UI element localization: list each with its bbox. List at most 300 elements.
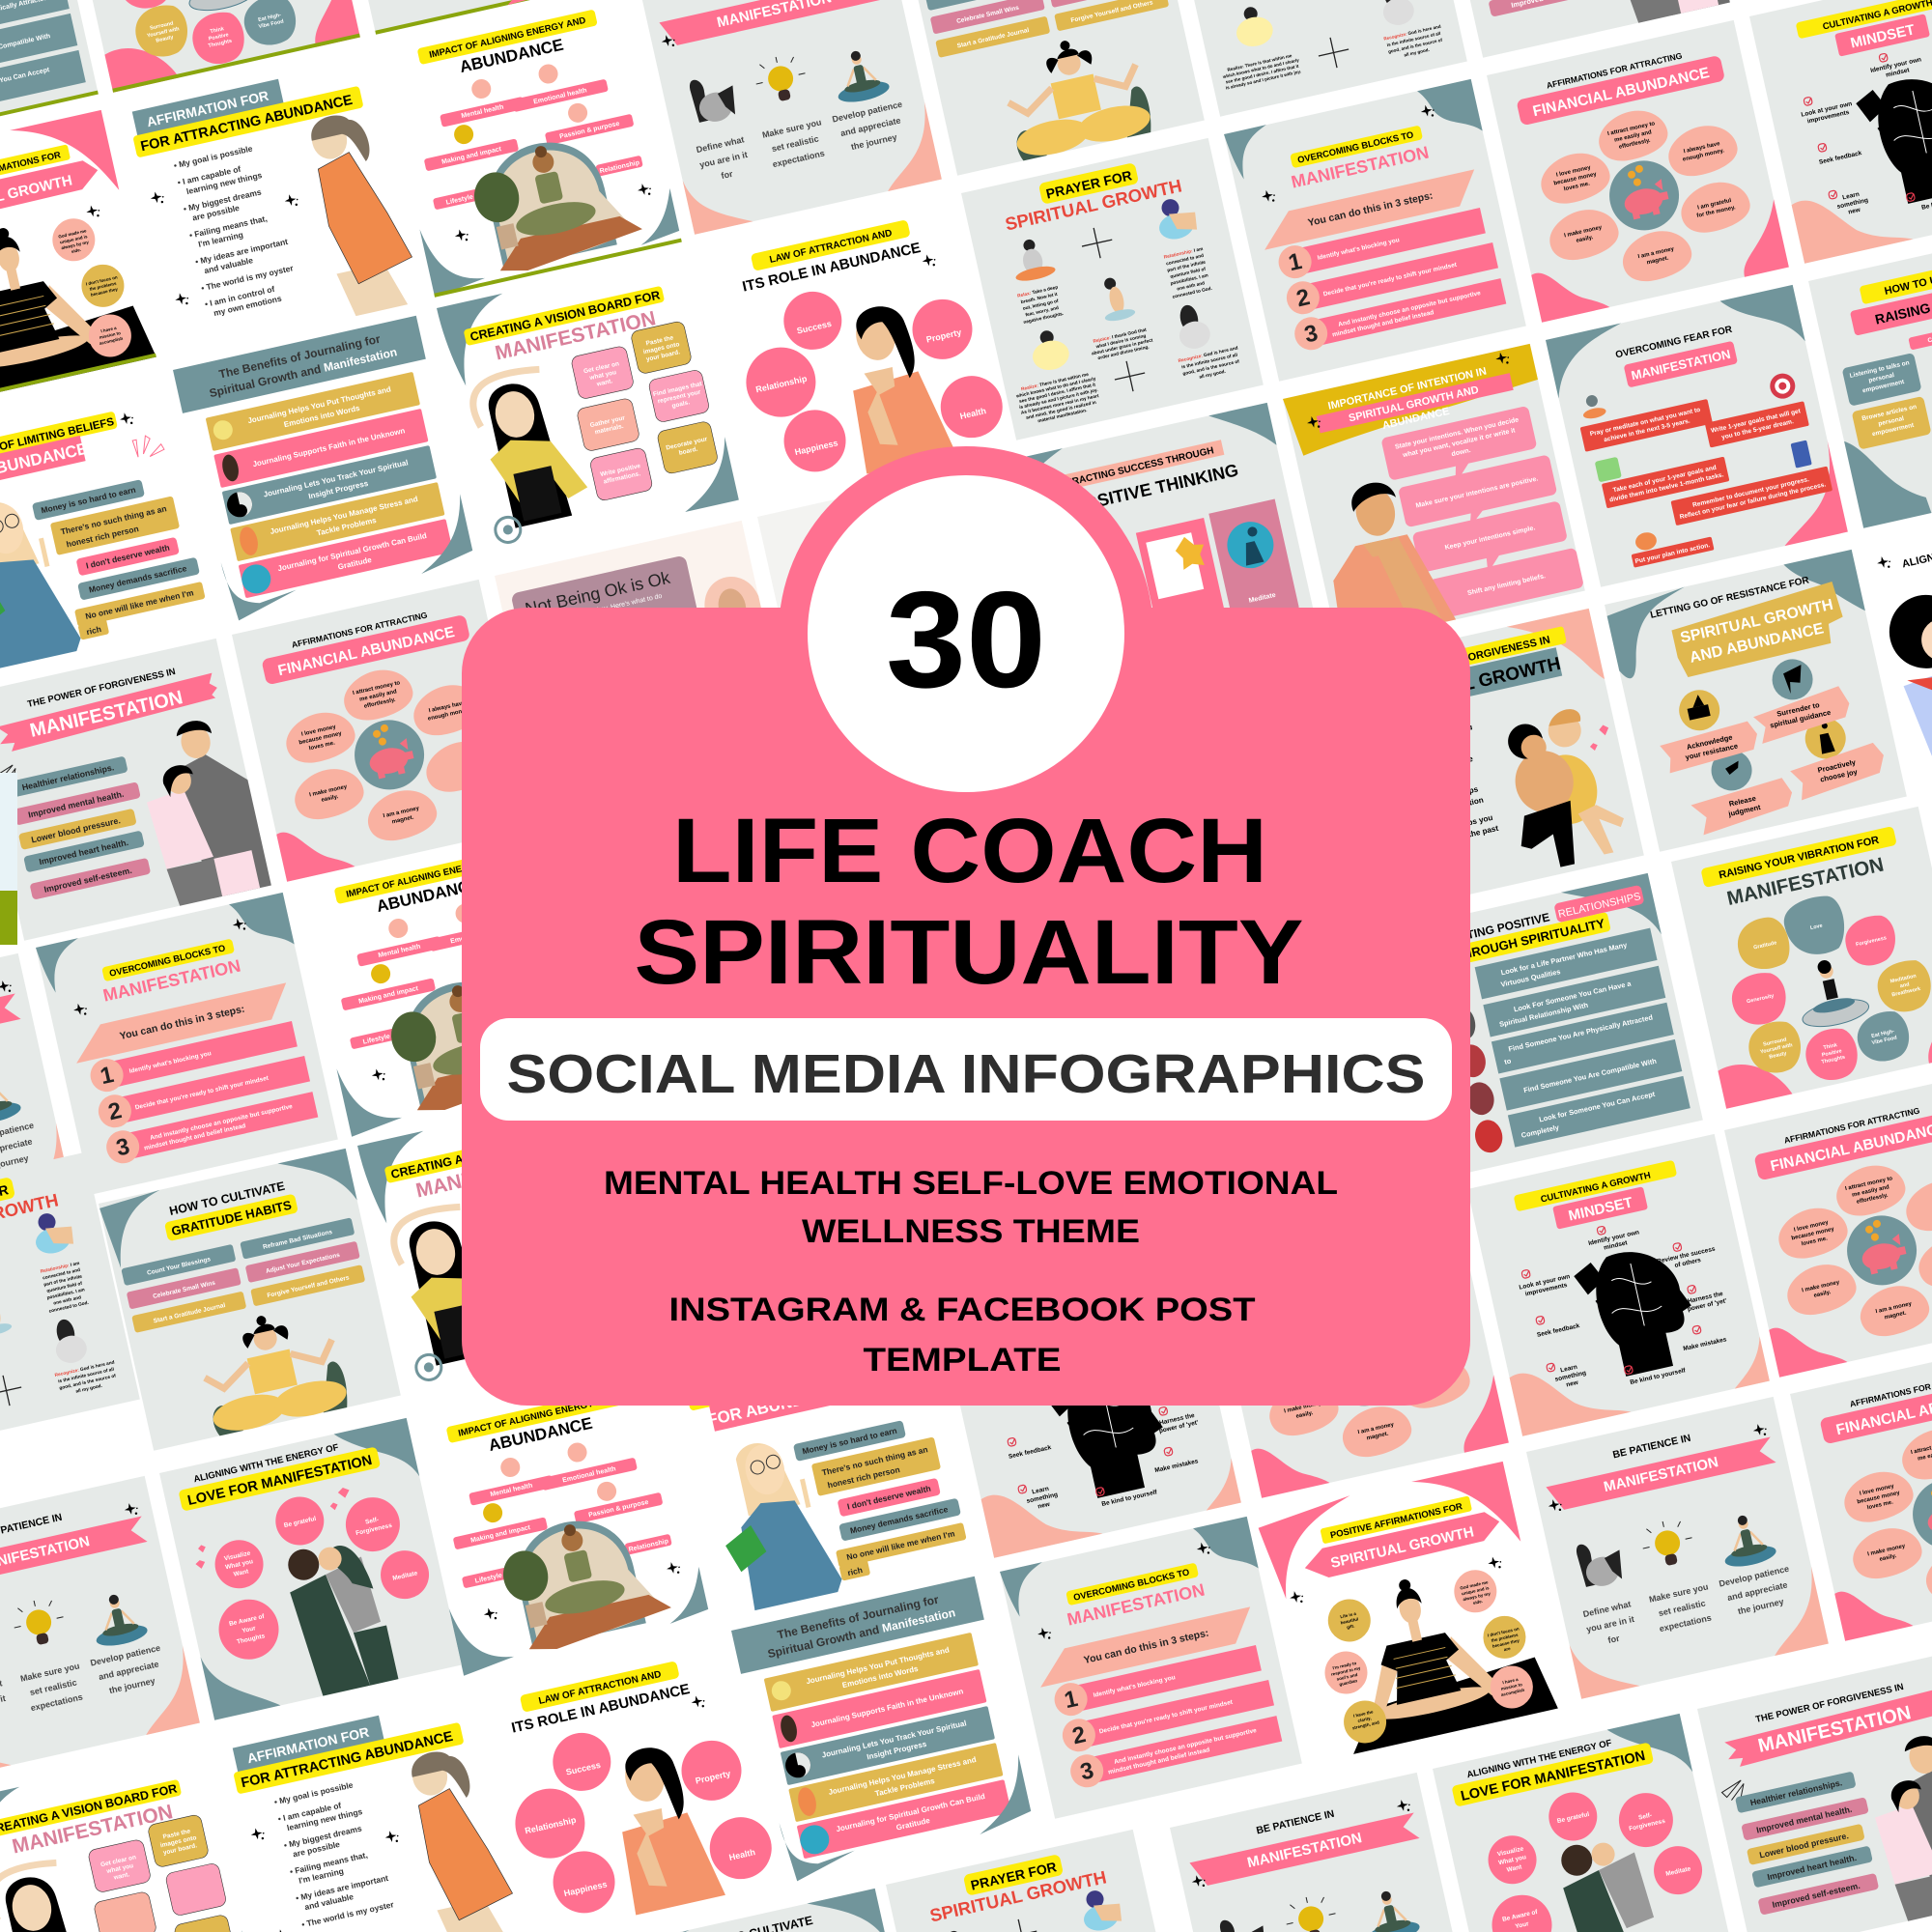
card: be patience (bottom): MANIFESTATION (1246, 1830, 1363, 1871)
card: overcoming fear: achieve in the next 3-5 years. (1604, 417, 1690, 443)
card: positive affirmations (top left): because they (90, 287, 119, 298)
card: power of forgiveness (bottom right): MANIFESTATION (1756, 1702, 1913, 1757)
card: aligning with the energy of love (bottom): Forgiveness (1629, 1818, 1666, 1833)
card: attracting success through positive thinking: POSITIVE THINKING (1071, 460, 1240, 516)
card: forgiveness in spiritual growth: SPIRITUAL GROWTH (1378, 654, 1563, 714)
card: financial abundance: I always have (1683, 141, 1721, 155)
card: financial abundance (right): I make money (1802, 1280, 1840, 1293)
card: creating a vision board: materials. (594, 423, 624, 436)
card: positive affirmations: soul's and (1336, 1672, 1358, 1682)
card: creating a vision board (bottom left): Get clear on (99, 1854, 137, 1868)
card: prayer for spiritual growth: Realize: There is that within me (1020, 372, 1090, 392)
card: be patience (top): for (721, 169, 734, 181)
card: raising your vibration: Yourself with (1760, 1042, 1794, 1056)
card: importance of intention: ABUNDANCE (1381, 406, 1451, 432)
card: financial abundance (left): I am a money (383, 806, 420, 819)
card: positive affirmations (top left): I have a (100, 326, 118, 333)
subtitle pill: SOCIAL MEDIA INFOGRAPHICS (506, 1043, 1426, 1105)
card: law of attraction: Relationship (754, 374, 809, 394)
main pink panel (462, 446, 1470, 1406)
card: creating a vision board: Write positive (600, 463, 641, 478)
card: financial abundance (left): I love money (301, 724, 337, 738)
card: power of forgiveness (bottom right): Healthier relationships. (1749, 1777, 1843, 1807)
card: power of forgiveness (bottom right) (1697, 1654, 1932, 1932)
card: be patience (left): Develop patience (90, 1643, 161, 1668)
card: how to use (right edge): personal (1868, 372, 1895, 384)
card: limiting beliefs: No one will like me when I'm (84, 587, 195, 621)
card: attracting positive relationships: Completely (1520, 1122, 1561, 1140)
card: impact (below panel): Lifestyle (474, 1573, 503, 1585)
card: how to cultivate gratitude habits: Start a Gratitude Journal (153, 1302, 226, 1324)
card: attracting positive relationships: Find Someone You Are Compatible With (1522, 1057, 1658, 1094)
card: limiting beliefs: I don't deserve wealth (85, 543, 170, 571)
card: creating a vision board (left of panel): CREATING A VISION BOARD FOR (389, 1125, 582, 1181)
card: prayer (left edge): all my good. (75, 1383, 103, 1395)
card: forgiveness in spiritual growth: It helps you (1449, 813, 1493, 832)
card: creating a vision board: CREATING A VISION BOARD FOR (469, 288, 662, 344)
card: affirmation for attracting abundance (top): my own emotions (213, 294, 283, 318)
card: overcoming blocks (bottom): You can do this in 3 steps: (1083, 1628, 1209, 1666)
card: financial abundance: I make money (1564, 225, 1603, 239)
card: how to cultivate gratitude habits: GRATITUDE HABITS (170, 1198, 293, 1238)
card: prayer for spiritual growth: out, letting go of (1022, 298, 1060, 312)
card: prayer (top): good, and is the source of (1388, 38, 1443, 54)
card: positive affirmations (top left): side. (71, 247, 81, 254)
card: law of attraction (698, 194, 1011, 499)
card: letting go of resistance: your resistance (1685, 742, 1739, 761)
card: forgiveness in spiritual growth: It heals you (1429, 723, 1473, 741)
card: positive affirmations: the problems (1491, 1633, 1519, 1643)
theme description: MENTAL HEALTH SELF-LOVE EMOTIONAL (604, 1165, 1338, 1202)
card: financial abundance (bottom right): easily. (1879, 1553, 1897, 1563)
card: benefits of journaling: Emotions into Words (283, 404, 361, 429)
card: power of forgiveness in manifestation: Improved self-esteem. (43, 866, 132, 895)
card: cultivating a growth mindset: MINDSET (1567, 1194, 1634, 1225)
card: overcoming blocks (bottom): 1 (1062, 1686, 1080, 1714)
card: affirmation (bottom): learning new things (286, 1806, 363, 1833)
card: attracting success through positive thinking (1020, 403, 1322, 705)
card: prayer for spiritual growth (961, 138, 1264, 440)
card: prayer (bottom) (886, 1830, 1188, 1932)
card: gratitude (bottom) (628, 1889, 930, 1932)
card: raising your vibration (top): Surround (150, 20, 174, 32)
card: overcoming blocks (1224, 79, 1526, 382)
card: importance of intention: IMPORTANCE OF INTENTION IN (1327, 365, 1488, 412)
card: financial abundance: effortlessly. (1618, 138, 1651, 151)
card: be patience (top) (639, 0, 942, 235)
card: attracting positive relationships: Look for Someone You Can Accept (1538, 1090, 1657, 1123)
card: letting go of resistance: AND ABUNDANCE (1689, 620, 1826, 667)
card: aligning with the energy of love (bottom): Want (1506, 1863, 1523, 1874)
card: financial abundance (right): me easily and (1852, 1184, 1890, 1199)
card: law of attraction (bottom): ITS ROLE IN ABUNDANCE (510, 1681, 692, 1737)
card: raising your vibration: and (1899, 981, 1910, 989)
card: how to cultivate gratitude habits: Count Your Blessings (147, 1256, 212, 1277)
card: benefits of journaling (bottom): Gratitude (895, 1816, 931, 1833)
card: positive affirmations: I'm ready to (1332, 1661, 1357, 1670)
card: how to use (right edge): empowerment (1861, 379, 1906, 394)
card: overcoming blocks (left): MANIFESTATION (101, 955, 242, 1006)
card: raising your vibration: Think (1823, 1042, 1839, 1051)
card: raising your vibration (top): Thoughts (208, 39, 233, 49)
card: aligning with the energy of love (bottom): Self- (1637, 1812, 1653, 1822)
card: power of forgiveness (bottom right): Lower blood pressure. (1758, 1831, 1850, 1860)
card: creating a vision board: want. (595, 378, 613, 388)
card: raising your vibration: RAISING YOUR VIBRATION FOR (1718, 835, 1880, 881)
card: prayer for spiritual growth: what I desire is coming (1094, 333, 1147, 351)
card: law of attraction: Success (796, 319, 833, 336)
card: raising your vibration (top): Think (210, 26, 226, 35)
card: attracting positive relationships: Look for a Life Partner Who Has Many (1500, 940, 1629, 977)
card: creating a vision board: Decorate your (666, 436, 708, 452)
card: law of attraction (bottom) (468, 1635, 781, 1932)
card: overcoming blocks: 3 (1302, 320, 1321, 348)
card: impact (left of panel): ABUNDANCE (375, 875, 482, 916)
card: affirmation (bottom): • My biggest dreams (283, 1824, 363, 1850)
card: overcoming blocks: Identify what's blocking you (1317, 237, 1400, 262)
card: cultivating a growth mindset (top right): MINDSET (1849, 21, 1917, 52)
card: overcoming blocks (left): 2 (106, 1097, 124, 1125)
card: affirmation (bottom): are possible (292, 1839, 341, 1860)
card: how to use (right edge): empowerment (1871, 422, 1916, 438)
card: creating a vision board: represent your (657, 388, 702, 405)
card: financial abundance (below panel): I am a money (1357, 1422, 1395, 1435)
card: positive affirmations: I don't focus on (1487, 1626, 1520, 1638)
card: affirmation (bottom): • I am capable of (277, 1801, 342, 1824)
card: creating a vision board: Gather your (589, 414, 626, 429)
card: financial abundance: magnet. (1646, 255, 1669, 266)
card: attracting positive relationships: to (1503, 1056, 1513, 1066)
card: creating a vision board: your board. (645, 349, 681, 363)
card: benefits of journaling (bottom): Insight Progress (866, 1740, 928, 1761)
card: cultivating a growth mindset (1467, 1134, 1770, 1436)
card: prayer (left edge): one with and (53, 1294, 82, 1307)
card: benefits of journaling: Journaling Helps You Put Thoughts and (247, 384, 392, 425)
card: power of forgiveness in manifestation: MANIFESTATION (28, 687, 185, 742)
card: benefits of journaling (bottom): Tackle Problems (874, 1776, 936, 1798)
card: financial abundance (right): I love money (1794, 1220, 1830, 1234)
card: limiting beliefs (below panel) (671, 1315, 974, 1617)
card: affirmation for attracting abundance (top): I'm learning (197, 230, 244, 249)
card: be patience (left) (0, 1476, 200, 1778)
card: prayer for spiritual growth: Relax: Take a deep (1017, 285, 1059, 299)
card: overcoming fear: Reflect on your fear or failure during the process. (1679, 481, 1827, 521)
card: prayer for spiritual growth: part of the infinite (1167, 260, 1207, 273)
card: overcoming blocks (bottom): Identify what's blocking you (1093, 1674, 1176, 1699)
card: be patience (top): set realistic (771, 133, 819, 154)
card: financial abundance (left): I make money (309, 784, 348, 798)
card: not being ok is ok: It's okay to not be okay. Here's what to do (540, 593, 663, 627)
card: cultivating a growth mindset (top right): something (1836, 197, 1869, 211)
card: forgiveness in spiritual growth: love (1452, 767, 1469, 780)
card: raising your vibration (top) (58, 0, 360, 93)
card: aligning with the energy of love: Forgiveness (355, 1522, 393, 1537)
card: be patience (left): set realistic (29, 1677, 77, 1697)
card: prayer for spiritual growth: fear, worry, and (1025, 305, 1060, 318)
card: overcoming fear: you to the 5-year dream. (1721, 418, 1795, 441)
card: letting go of resistance: LETTING GO OF RESISTANCE FOR (1649, 575, 1811, 621)
card: impact (below panel): IMPACT OF ALIGNING ENERGY AND (457, 1394, 616, 1439)
card: benefits of journaling: Gratitude (337, 555, 373, 572)
card: raising your vibration (top): Yourself with (147, 26, 181, 40)
card: overcoming blocks (left): 3 (114, 1133, 132, 1161)
card: forgiveness in spiritual growth: Heal the (1442, 754, 1474, 770)
card: prayer for spiritual growth: As it becomes more real in my heart (1020, 393, 1099, 416)
card: prayer for spiritual growth: PRAYER FOR (1044, 167, 1133, 202)
card: creating a vision board (bottom left): what you (105, 1862, 134, 1875)
card: aligning with the energy of love: LOVE FOR MANIFESTATION (186, 1453, 374, 1509)
card: impact (below panel): Passion & purpose (588, 1499, 649, 1519)
card: how to cultivate gratitude habits: Reframe Bad Situations (263, 1229, 333, 1251)
card: financial abundance: me easily and (1614, 129, 1653, 144)
card: how to use (right edge): personal (1878, 415, 1905, 428)
card: aligning with the energy of love: Meditate (392, 1570, 418, 1582)
format description (668, 1292, 1256, 1378)
card: cultivating (below panel): Be kind to yourself (1101, 1489, 1158, 1508)
card: be patience in manifestation: BE PATIENCE IN (1611, 1433, 1691, 1461)
card: benefits of journaling (bottom): Spiritual Growth and Manifestation (766, 1605, 956, 1661)
card: cultivating (below panel) (939, 1256, 1241, 1558)
card: law of attraction (bottom): Health (728, 1847, 756, 1862)
card: aligning with the energy of love (159, 1418, 462, 1720)
card: impact of aligning energy (top): Making and impact (441, 146, 502, 166)
card: power of forgiveness (top) (1428, 0, 1730, 58)
card: financial abundance (left): me easily and (359, 689, 398, 703)
card: impact (left of panel) (297, 835, 599, 1137)
card: financial abundance (below panel) (1207, 1196, 1509, 1498)
card: be patience (bottom) (1170, 1773, 1472, 1932)
card: overcoming blocks (left): 1 (98, 1062, 116, 1090)
card: law of attraction: Happiness (794, 438, 838, 457)
card: benefits of journaling: Spiritual Growth and Manifestation (208, 345, 398, 400)
card: financial abundance: I love money (1556, 165, 1592, 179)
card: raising your vibration (top): Beauty (156, 35, 175, 44)
card: raising your vibration: Breathwork (1891, 986, 1922, 998)
card: impact (left of panel): IMPACT OF ALIGNING ENERGY AND (345, 855, 504, 900)
card: positive affirmations (top left): unique and is (60, 234, 88, 244)
card: law of attraction (bottom): Relationship (524, 1815, 578, 1835)
card: raising your vibration (top): Positive (208, 32, 229, 43)
card: cultivating a growth mindset (top right): mindset (1886, 67, 1911, 79)
card: prayer for spiritual growth: Recognize: God is here and (1178, 345, 1238, 364)
card: financial abundance (bottom right): because money (1857, 1491, 1901, 1505)
card: forgiveness in spiritual growth: THE POWER OF FORGIVENESS IN (1378, 635, 1551, 684)
card: raising your vibration: Generosity (1747, 993, 1776, 1005)
card: affirmation (bottom) (217, 1690, 523, 1932)
card: overcoming blocks: 2 (1294, 284, 1312, 312)
card: positive affirmations (top left) (0, 110, 156, 412)
card: be patience (top): expectations (772, 148, 826, 169)
card: financial abundance (below panel): I make money (1284, 1401, 1322, 1414)
card: how to use (right edge) (1808, 226, 1932, 528)
card: be patience (left): and appreciate (98, 1659, 159, 1682)
card: impact of aligning energy (top): Mental health (461, 104, 504, 120)
card: creating a vision board (bottom left): Paste the (162, 1828, 191, 1841)
card: benefits of journaling (bottom): Emotions into Words (841, 1664, 920, 1690)
main title: LIFE COACH (672, 800, 1267, 902)
card: overcoming blocks: You can do this in 3 steps: (1307, 190, 1434, 229)
card: affirmation (bottom): • The world is my oyster (300, 1899, 395, 1929)
card: overcoming blocks (bottom): OVERCOMING BLOCKS TO (1072, 1566, 1190, 1603)
card: how to cultivate gratitude habits: Adjust Your Expectations (266, 1252, 341, 1275)
theme description (604, 1165, 1338, 1250)
card: letting go of resistance: Proactively (1817, 757, 1858, 775)
card: financial abundance (left): I attract money to (353, 680, 401, 696)
card: prayer (left edge): is the infinite source of all (58, 1367, 115, 1384)
card: financial abundance (left): magnet. (391, 814, 414, 825)
card: positive affirmations: I have a (1502, 1677, 1520, 1685)
card: how to use (right edge): Listening to talks on (1849, 359, 1910, 380)
card: power of forgiveness in manifestation: Lower blood pressure. (30, 815, 122, 844)
card: financial abundance (bottom right): I make money (1867, 1544, 1906, 1557)
card: prayer (left edge): possibilities. I am (46, 1287, 85, 1301)
card: overcoming fear: Put your plan into action. (1634, 542, 1711, 565)
card: overcoming blocks (bottom): 3 (1078, 1757, 1096, 1785)
card: financial abundance (right): effortlessly. (1856, 1193, 1889, 1206)
card: affirmation (bottom): • My ideas are important (295, 1873, 389, 1903)
card: cultivating a growth mindset: Harness the (1688, 1291, 1724, 1305)
card: positive affirmations: always by my (1463, 1591, 1492, 1602)
card: impact (below panel): ABUNDANCE (487, 1414, 594, 1455)
card: creating a vision board (bottom left): want. (112, 1871, 130, 1882)
card: prayer (left edge): good, and is the source of (59, 1373, 117, 1391)
card: aligning with the energy of love (bottom): LOVE FOR MANIFESTATION (1460, 1748, 1647, 1804)
card: positive affirmations: respond to my (1330, 1665, 1361, 1677)
card: how to use (right edge): Browse articles on (1861, 404, 1918, 422)
card: overcoming blocks (bottom): mindset thought and belief instead (1108, 1747, 1210, 1776)
card: cultivating a growth mindset (top right): Look at your own (1801, 100, 1853, 119)
card: overcoming fear: OVERCOMING FEAR FOR (1614, 325, 1734, 360)
card: impact (below panel): Emotional health (562, 1465, 616, 1484)
card: prayer (left edge): quantum field of (46, 1281, 83, 1294)
card: affirmation for attracting abundance (top): • My ideas are important (194, 237, 289, 267)
card: prayer for spiritual growth: possibilities. I am (1170, 272, 1208, 287)
card: impact (below panel) (409, 1374, 711, 1676)
card: be patience in manifestation: Make sure you (1648, 1581, 1709, 1605)
card: affirmation for attracting abundance (top): • I am capable of (177, 164, 242, 187)
card: be patience (left): expectations (30, 1691, 84, 1713)
card: letting go of resistance: SPIRITUAL GROWTH (1679, 597, 1834, 646)
card: overcoming blocks (left): And instantly choose an opposite but supportive (150, 1103, 294, 1142)
card: financial abundance (left): easily. (321, 794, 339, 804)
card: gratitude habits (top) (902, 0, 1205, 176)
card: financial abundance: loves me. (1563, 181, 1591, 192)
card: financial abundance (left): enough money. (427, 707, 470, 723)
card: letting go of resistance: choose joy (1819, 767, 1859, 784)
card: letting go of resistance: judgment (1727, 803, 1762, 818)
card: attracting positive relationships: THROUGH SPIRITUALITY (1454, 916, 1606, 963)
card: positive affirmations: side. (1472, 1599, 1483, 1605)
card: power of forgiveness in manifestation (0, 639, 271, 941)
card: limiting beliefs: rich (85, 624, 102, 637)
card: be patience in manifestation (1526, 1397, 1829, 1699)
card: be patience (left): Make sure you (19, 1661, 80, 1684)
theme description: WELLNESS THEME (802, 1213, 1140, 1250)
card: be patience (bottom): BE PATIENCE IN (1255, 1808, 1335, 1836)
card: benefits of journaling: The Benefits of Journaling for (217, 332, 382, 382)
card: how to cultivate gratitude habits: Forgive Yourself and Others (267, 1274, 351, 1299)
card: aligning (right edge) (1867, 491, 1932, 793)
card: benefits of journaling (173, 315, 476, 623)
card: positive affirmations: Life is a (1340, 1611, 1357, 1619)
card: be patience (top): the journey (850, 132, 897, 152)
card: limiting beliefs: Money is so hard to earn (41, 485, 136, 515)
card: financial abundance (bottom right): I love money (1860, 1484, 1895, 1497)
card: financial abundance (right): I attract money to (1845, 1176, 1893, 1192)
card: prayer (top) (1165, 0, 1467, 117)
card: financial abundance (right): magnet. (1884, 1310, 1907, 1321)
card: cultivating (below panel): new (1037, 1501, 1051, 1510)
card: creating a vision board: what you (588, 369, 617, 382)
card: positive affirmations: accomplish (1500, 1688, 1525, 1697)
card: overcoming blocks (bottom): 2 (1070, 1721, 1088, 1749)
card: cultivating a growth mindset: new (1566, 1379, 1579, 1388)
card: positive affirmations: I have the (1353, 1709, 1374, 1719)
card: cultivating (below panel): something (1026, 1492, 1059, 1505)
panel tab circle (779, 446, 1153, 821)
card: prayer (top): Realize: There is that within me (1227, 53, 1293, 72)
card: raising your vibration: Beauty (1769, 1051, 1788, 1061)
card: be patience in manifestation: Develop patience (1719, 1564, 1790, 1589)
card: limiting beliefs (below panel): I don't deserve wealth (846, 1484, 931, 1512)
card: overcoming blocks: Decide that you're ready to shift your mindset (1322, 262, 1459, 298)
card: benefits of journaling: Journaling Lets You Track Your Spiritual (263, 458, 409, 499)
format description: TEMPLATE (864, 1342, 1061, 1378)
card: financial abundance: I am a money (1637, 246, 1675, 260)
number badge: 30 (886, 563, 1046, 717)
card: limiting beliefs (below panel): FOR ABUNDANCE (706, 1380, 851, 1430)
card: positive affirmations (1256, 1462, 1558, 1764)
card: overcoming blocks (left) (36, 893, 338, 1195)
card: creating a vision board: MANIFESTATION (494, 307, 658, 365)
card: creating a vision board: images onto (642, 341, 680, 355)
card: impact (below panel): Relationship (628, 1538, 669, 1553)
card: limiting beliefs (below panel): There's no such thing as an (821, 1444, 928, 1477)
card: impact of aligning energy (top): Emotional health (533, 87, 587, 105)
card: power of forgiveness (bottom right): Improved self-esteem. (1772, 1881, 1861, 1910)
card: letting go of resistance (1605, 550, 1907, 852)
card: limiting beliefs: Money demands sacrifice (88, 563, 187, 595)
card: power of forgiveness in manifestation: Improved mental health. (27, 789, 125, 820)
card: importance of intention: SPIRITUAL GROWTH AND (1348, 384, 1480, 424)
card: limiting beliefs: There's no such thing as an (60, 503, 167, 536)
card: limiting beliefs (below panel): rich (846, 1565, 864, 1577)
card: positive affirmations: beautiful (1340, 1616, 1359, 1625)
card: be patience in manifestation: MANIFESTATION (1603, 1454, 1719, 1495)
card: forgiveness in spiritual growth: vibration (1450, 796, 1485, 811)
card: law of attraction: ITS ROLE IN ABUNDANCE (741, 240, 923, 296)
card: power of forgiveness in manifestation: Healthier relationships. (21, 762, 115, 792)
card: prayer (left edge): connected to God. (48, 1300, 89, 1315)
card: aligning with the energy of love: Your (242, 1625, 257, 1634)
card: creating a vision board (bottom left): your board. (162, 1842, 198, 1857)
card: positive affirmations: strength, and (1351, 1719, 1380, 1730)
format description: INSTAGRAM & FACEBOOK POST (668, 1292, 1256, 1328)
card: financial abundance: I am grateful (1697, 198, 1732, 212)
card: how to cultivate gratitude habits (99, 1149, 401, 1451)
card: cultivating a growth mindset: improvements (1524, 1282, 1569, 1297)
card: financial abundance (right): loves me. (1801, 1236, 1829, 1247)
card: cultivating (below panel): Learn (1032, 1486, 1050, 1495)
card: importance of intention: Keep your intentions simple. (1444, 525, 1536, 552)
card: impact of aligning energy (top): IMPACT OF ALIGNING ENERGY AND (428, 15, 587, 61)
card: overcoming blocks (bottom): And instantly choose an opposite but supportive (1114, 1727, 1258, 1766)
card: attracting positive relationships: RELATIONSHIPS (1557, 891, 1642, 921)
card: importance of intention: Make sure your intentions are positive. (1415, 475, 1539, 510)
card: creating a vision board: board. (678, 446, 698, 457)
card: affirmation for attracting abundance (top): • The world is my oyster (200, 263, 295, 293)
card: attracting positive relationships: Spiritual Relationship With (1498, 1001, 1589, 1029)
